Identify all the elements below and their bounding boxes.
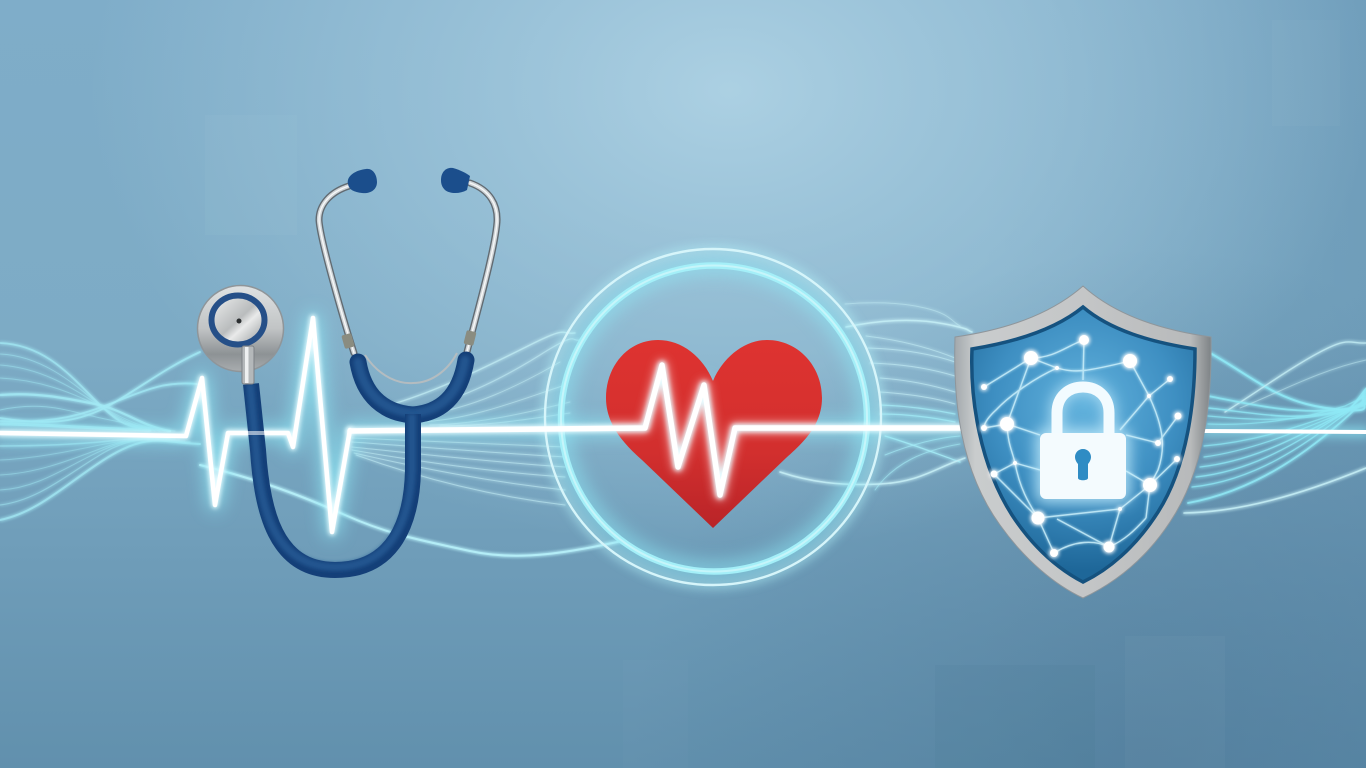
heart icon xyxy=(600,340,830,528)
shield frame xyxy=(955,286,1211,598)
wave strands: right bundle xyxy=(1184,342,1366,513)
glowing circle rings xyxy=(545,249,881,585)
yoke tube xyxy=(358,360,466,415)
right ear tube xyxy=(467,183,497,352)
security shield xyxy=(955,286,1211,598)
collars xyxy=(341,330,477,349)
spring wire xyxy=(365,353,457,383)
wave strands: centre-left bundle xyxy=(200,332,622,556)
right ear tip xyxy=(441,168,470,193)
stethoscope xyxy=(198,168,497,570)
pulse line glow xyxy=(0,318,1366,532)
padlock icon xyxy=(1036,387,1130,503)
pulse line xyxy=(0,318,1366,532)
chest piece xyxy=(198,286,284,384)
network lines xyxy=(984,340,1178,553)
network nodes xyxy=(981,335,1182,557)
main tube xyxy=(250,384,413,570)
shield face xyxy=(972,307,1195,582)
left ear tube xyxy=(319,186,354,353)
wave strands: centre-right bundle xyxy=(780,303,972,490)
wave strands: left bundle xyxy=(0,343,200,520)
pulse line highlight over tube xyxy=(240,431,288,435)
left ear tip xyxy=(348,169,377,193)
